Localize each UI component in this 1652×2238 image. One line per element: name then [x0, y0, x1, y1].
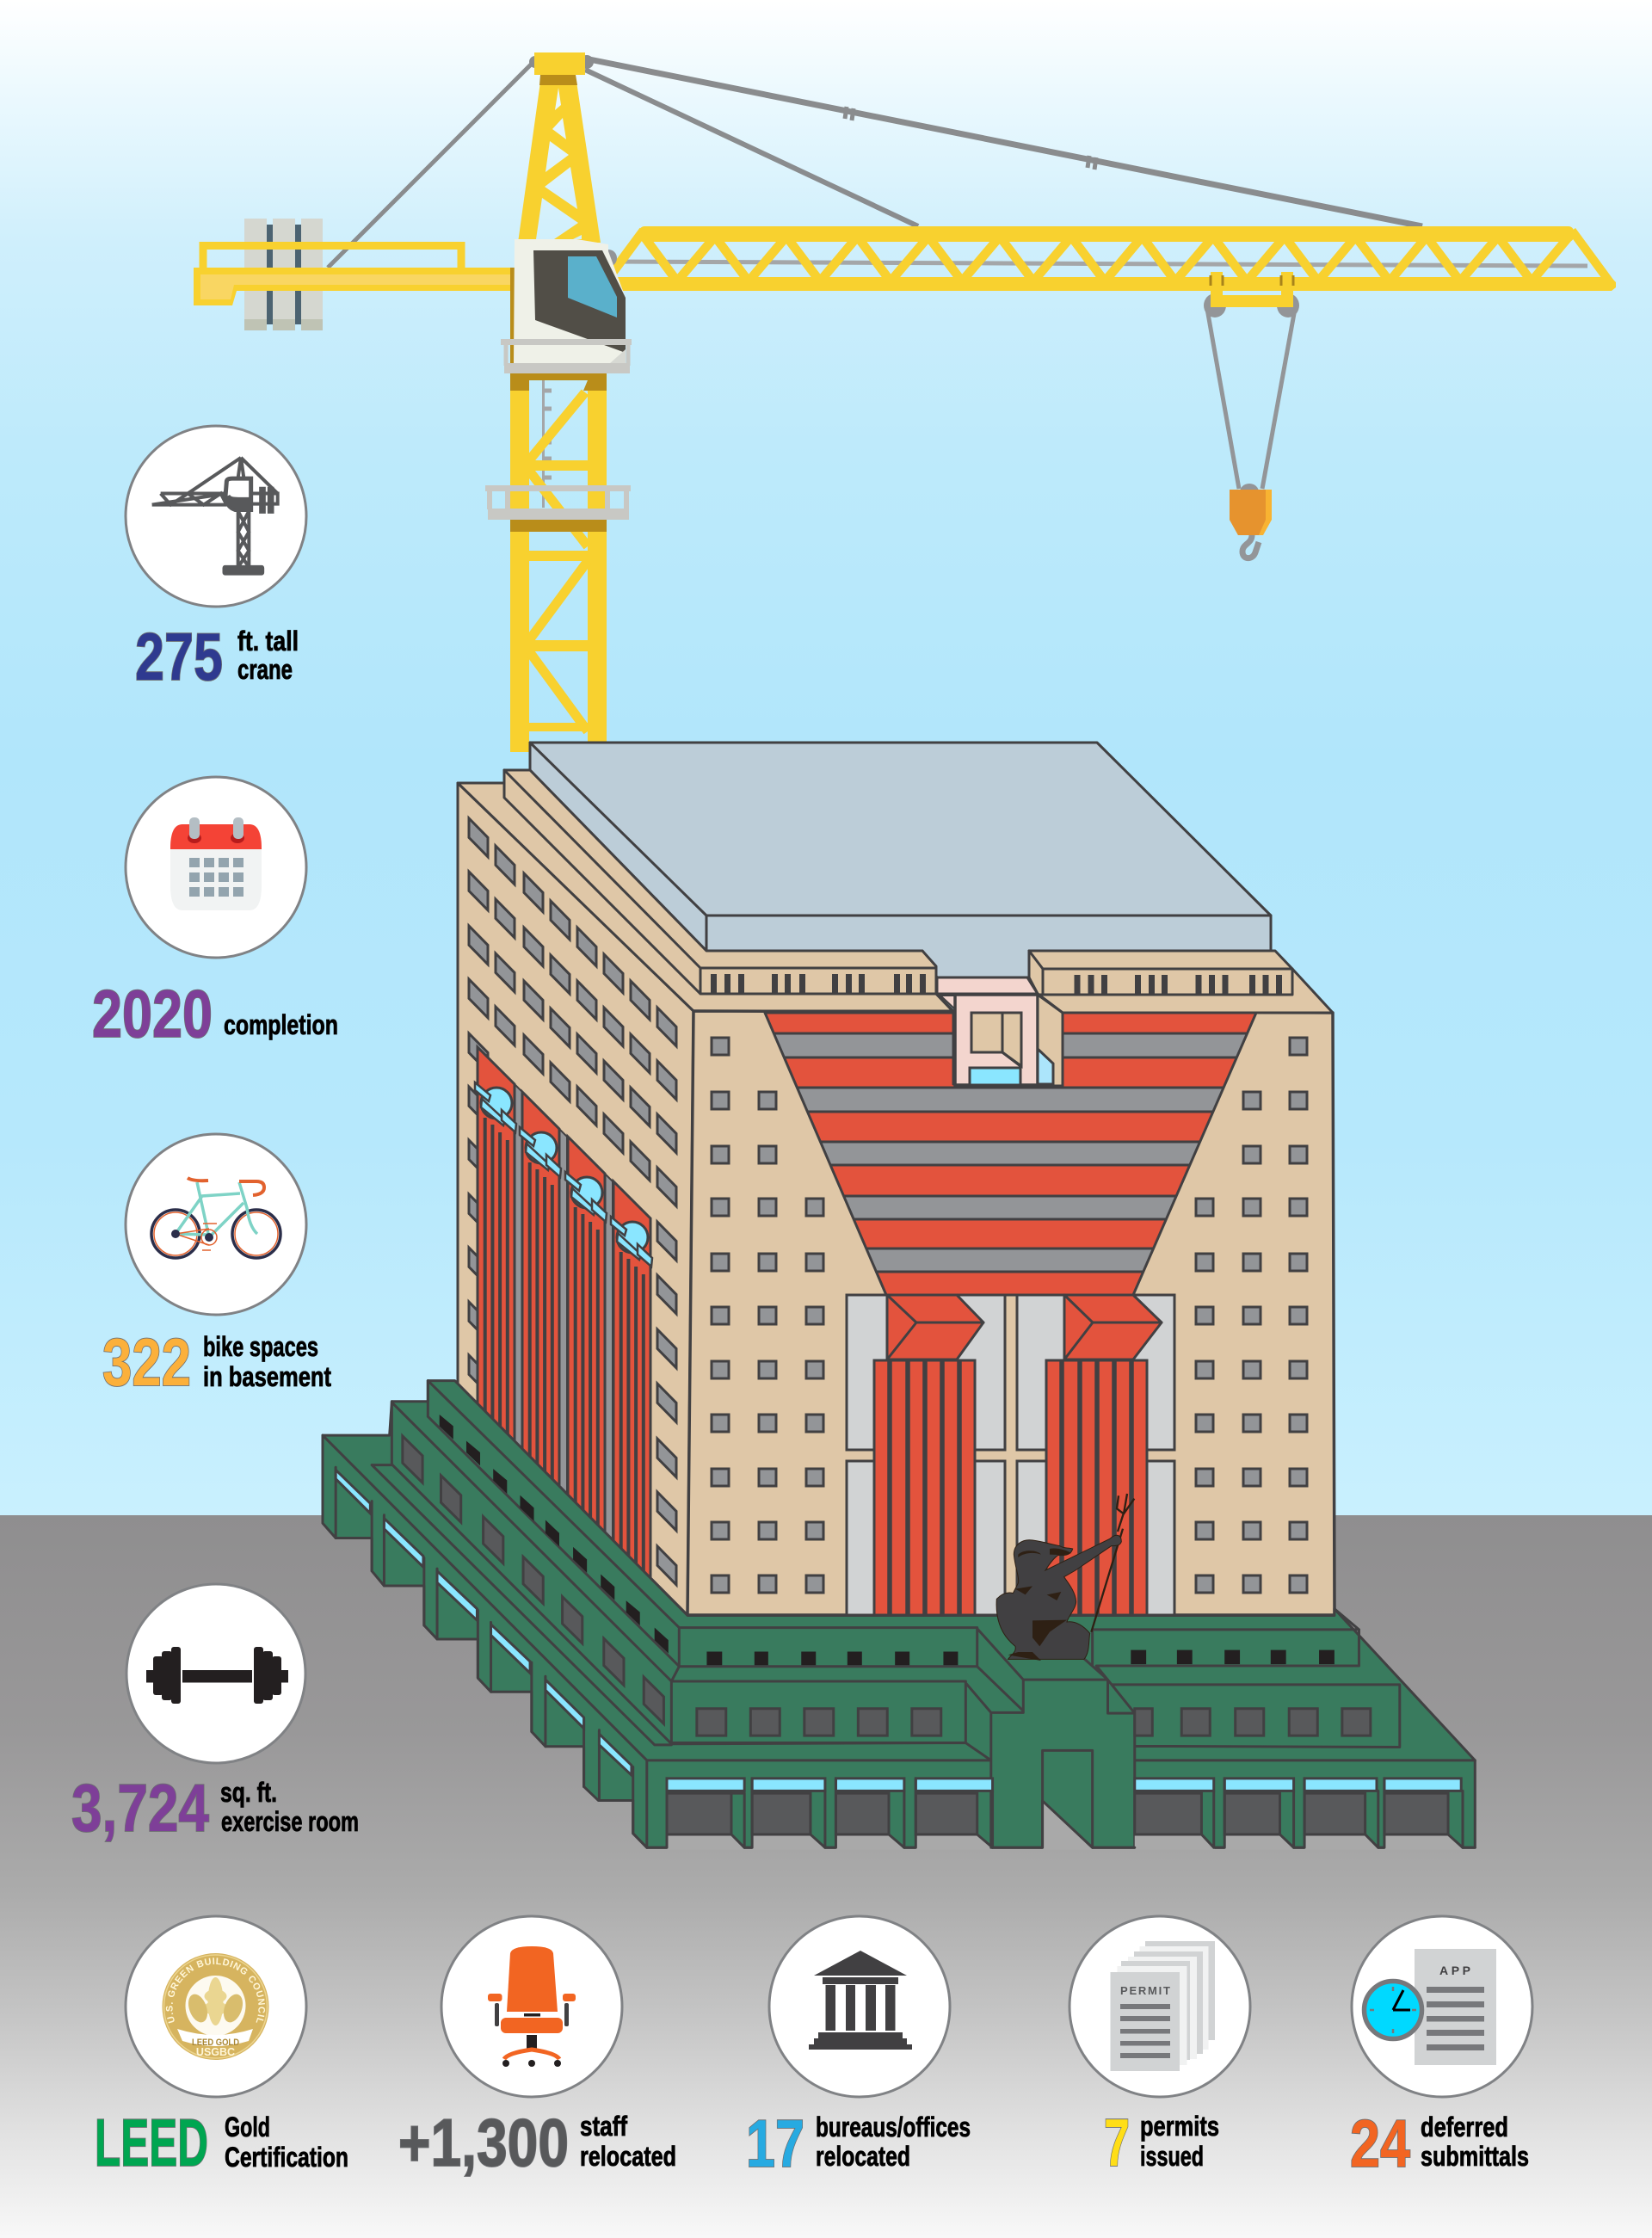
label: submittals	[1421, 2141, 1529, 2172]
background: ground	[0, 1515, 1652, 2238]
stat: +1,300 staff relocated	[398, 1916, 676, 2180]
number: 2020	[92, 976, 213, 1051]
label: relocated	[580, 2141, 676, 2172]
label: crane	[237, 654, 293, 685]
icon circle: LEED badge: U.S. GREEN BUILDING COUNCIL	[165, 1957, 265, 2024]
stat: 2020 completion	[92, 777, 338, 1051]
stat: 275 ft. tall crane	[126, 426, 306, 694]
number: 24	[1350, 2105, 1410, 2181]
label: deferred	[1421, 2112, 1508, 2142]
left side wall	[458, 783, 693, 1615]
crane lower mast	[510, 373, 607, 752]
label: Certification	[225, 2142, 348, 2173]
number: 7	[1104, 2105, 1130, 2180]
crane hook	[1230, 484, 1272, 558]
crane trolley	[1204, 272, 1299, 318]
number: +1,300	[398, 2105, 569, 2180]
crane counter-jib	[194, 246, 512, 305]
upper setback top	[458, 770, 953, 1011]
terrace front bays	[647, 1779, 1475, 1850]
front windows right	[1196, 1038, 1307, 1593]
crane upper mast	[518, 52, 601, 243]
number: 275	[135, 619, 223, 694]
crane jib	[609, 226, 1616, 291]
number: 17	[746, 2105, 804, 2181]
right parapet	[1029, 951, 1333, 1013]
left wall red panels with garlands	[475, 1047, 652, 1752]
stat: LEED Gold Certification	[95, 1915, 348, 2180]
number: 322	[102, 1324, 191, 1400]
pilaster capitals	[887, 1295, 1162, 1359]
icon circle: dumbbell	[126, 1584, 305, 1763]
label: exercise room	[221, 1806, 359, 1837]
crane second platform	[485, 485, 631, 520]
number: LEED	[95, 2105, 208, 2180]
label: staff	[580, 2111, 627, 2142]
icon circle: application and clock	[1352, 1916, 1532, 2097]
pink rooftop portal	[936, 977, 1063, 1086]
label: bike spaces	[203, 1331, 318, 1362]
terrace side blue windows	[336, 1470, 632, 1775]
number: 3,724	[71, 1770, 209, 1846]
left parapet vents	[711, 974, 926, 993]
striped keystone	[757, 1013, 1265, 1295]
label: Gold	[225, 2112, 270, 2142]
label: completion	[224, 1009, 338, 1040]
label: permits	[1140, 2111, 1219, 2142]
stat: 17 bureaus/offices relocated	[746, 1916, 971, 2181]
stat: 24 deferred submittals	[1350, 1916, 1532, 2181]
left wall windows	[469, 818, 676, 1585]
crane cables	[328, 59, 1422, 268]
crane cab	[510, 239, 626, 364]
icon circle: crane	[126, 426, 306, 607]
label: in basement	[203, 1361, 331, 1392]
pilasters	[874, 1360, 1147, 1615]
Portlandia statue	[996, 1494, 1134, 1661]
terrace structure lines	[323, 1381, 1475, 1847]
front windows left	[712, 1038, 823, 1593]
label: relocated	[816, 2141, 910, 2172]
terrace grey windows	[403, 1436, 1371, 1736]
crane cab platform	[501, 339, 632, 373]
crane hoist ropes	[1207, 309, 1295, 489]
stat: 3,724 sq. ft. exercise room	[71, 1584, 359, 1846]
right parapet vents	[1074, 975, 1282, 994]
icon circle: office chair	[441, 1916, 622, 2097]
icon circle: bicycle	[126, 1134, 306, 1315]
central entry	[1043, 1750, 1093, 1850]
illustration: tower crane	[194, 52, 1616, 752]
icon circle: civic building	[769, 1916, 950, 2097]
icon circle: application and clock: APP	[1439, 1964, 1470, 1977]
label: issued	[1140, 2141, 1204, 2172]
label: ft. tall	[237, 626, 299, 657]
illustration: Portland Building	[323, 743, 1475, 1850]
icon circle: LEED badge: USGBC	[196, 2046, 235, 2058]
icon circle: permit stack: PERMIT	[1120, 1984, 1170, 1997]
green terraced base	[323, 1381, 1475, 1850]
label: bureaus/offices	[816, 2112, 971, 2142]
background: sky	[0, 0, 1652, 1515]
stat: 7 permits issued	[1069, 1916, 1250, 2180]
icon circle: permit stack	[1069, 1916, 1250, 2097]
label: sq. ft.	[220, 1777, 277, 1808]
pilaster lower panels	[847, 1295, 1174, 1615]
roof	[530, 743, 1271, 977]
icon circle: LEED badge: LEED GOLD	[192, 2038, 239, 2048]
crane counterweights	[244, 219, 323, 330]
front wall	[687, 1011, 1335, 1615]
icon circle: LEED badge	[124, 1915, 308, 2098]
terrace black windows	[440, 1415, 1335, 1665]
stat: 322 bike spaces	[102, 1134, 331, 1400]
icon circle: calendar	[126, 777, 306, 958]
